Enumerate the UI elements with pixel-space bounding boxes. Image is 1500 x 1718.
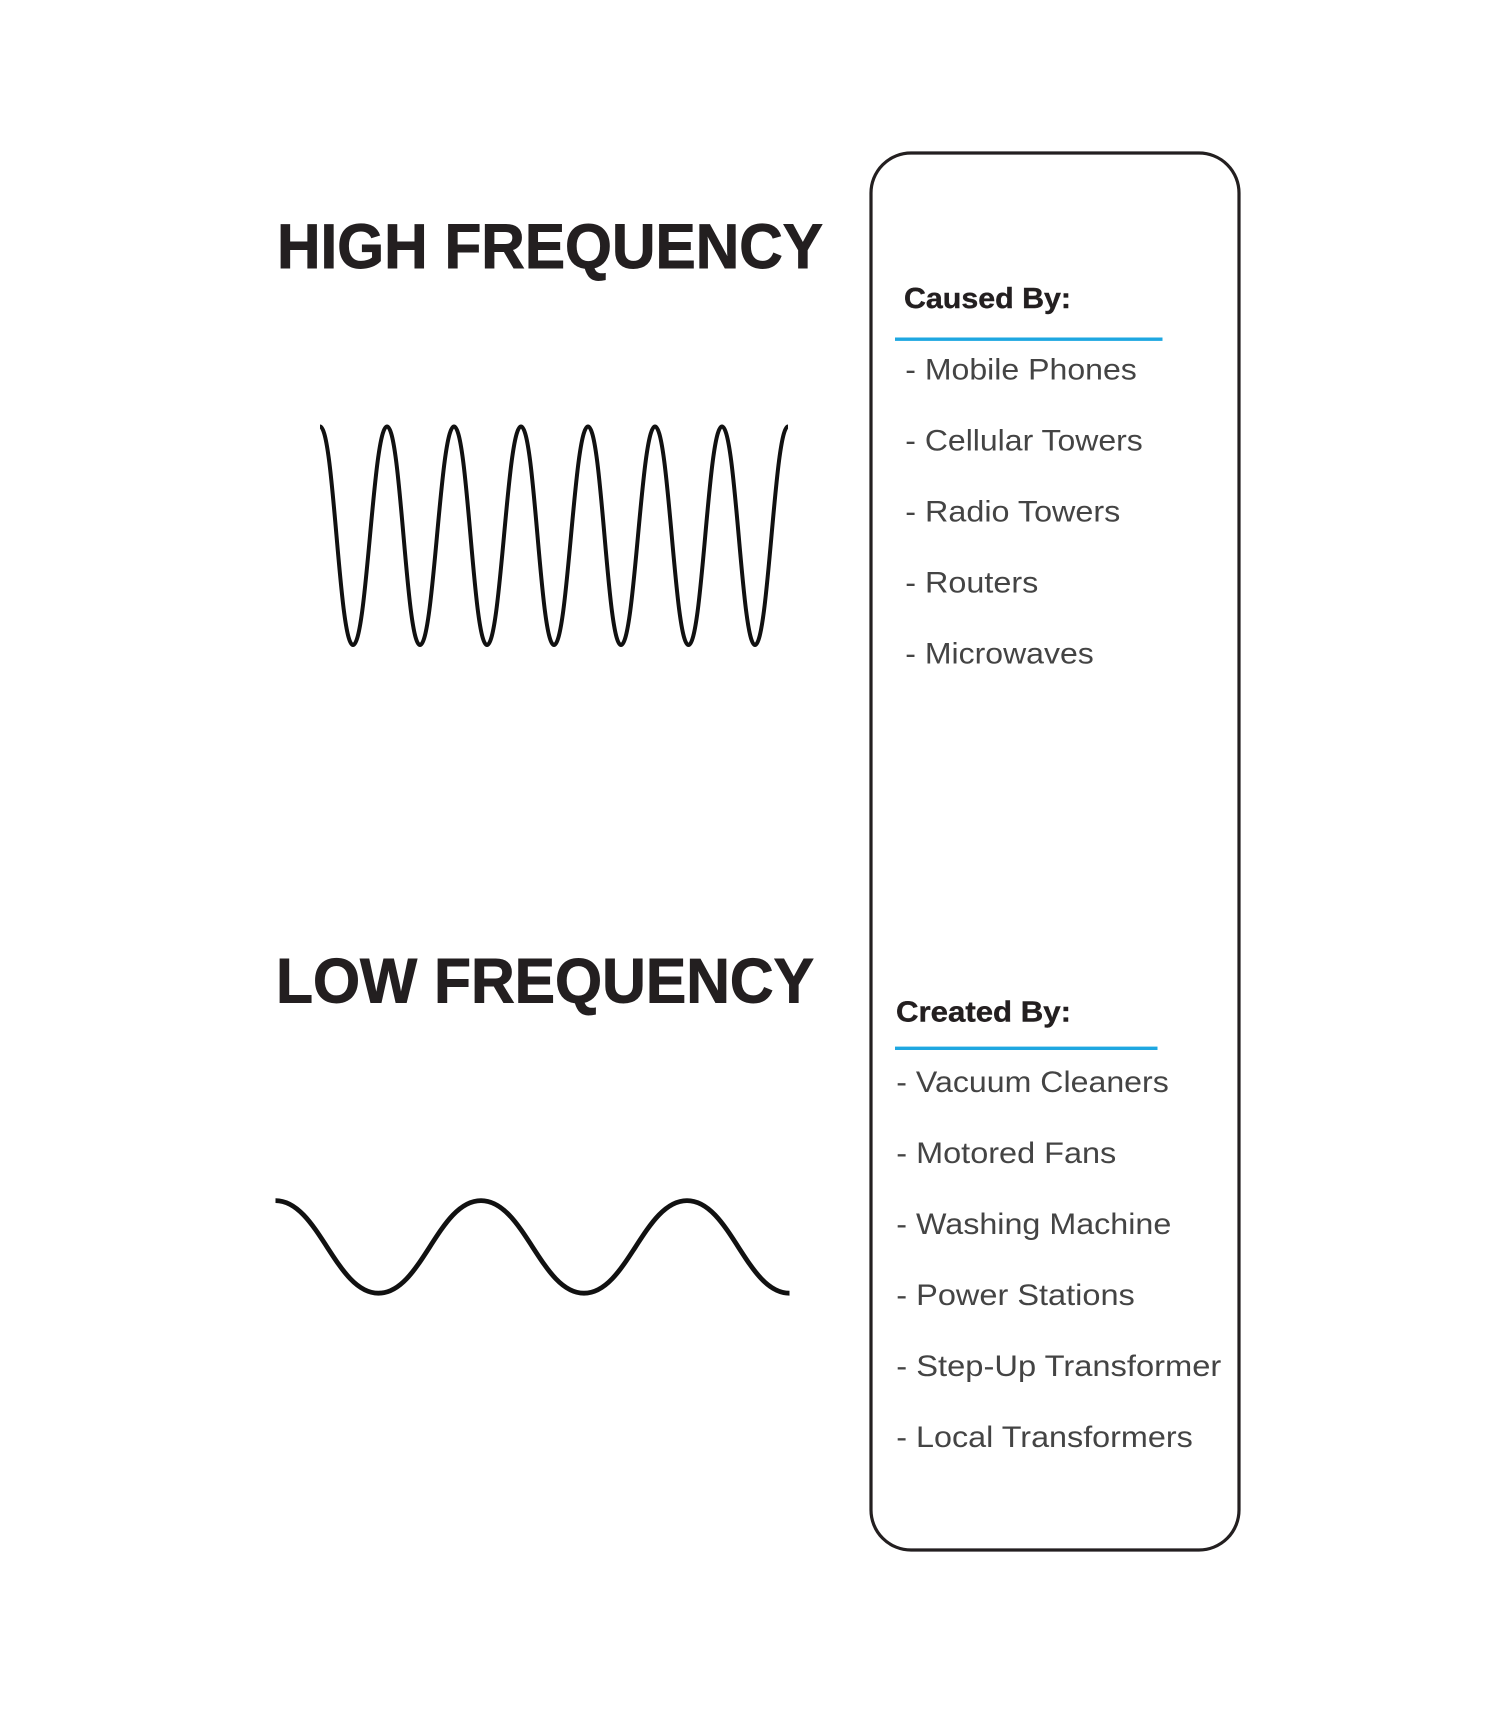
panel: sources list (871, 153, 1239, 1550)
heading: low frequency: LOW FREQUENCY (276, 946, 814, 1016)
section: created by (895, 996, 1221, 1454)
list: caused by items: - Radio Towers (905, 496, 1120, 529)
list: created by items: - Washing Machine (896, 1208, 1171, 1241)
divider: caused by underline (895, 338, 1162, 341)
list: caused by items (905, 354, 1143, 671)
chart: high frequency wave (320, 426, 788, 645)
list: created by items: - Local Transformers (896, 1421, 1193, 1454)
list: caused by items: - Cellular Towers (905, 425, 1143, 458)
list: created by items: - Vacuum Cleaners (896, 1066, 1169, 1099)
heading: high frequency: HIGH FREQUENCY (277, 212, 823, 282)
list: created by items: - Power Stations (896, 1279, 1135, 1312)
section: caused by (895, 283, 1162, 671)
divider: created by underline (895, 1047, 1158, 1050)
list: created by items (896, 1066, 1221, 1454)
list: caused by items: - Routers (905, 567, 1038, 600)
list: created by items: - Motored Fans (896, 1137, 1116, 1170)
list: caused by items: - Mobile Phones (905, 354, 1137, 387)
heading: caused by: Caused By: (904, 283, 1071, 315)
list: caused by items: - Microwaves (905, 638, 1094, 671)
list: created by items: - Step-Up Transformer (896, 1350, 1221, 1383)
chart: low frequency wave (276, 1201, 790, 1293)
heading: created by: Created By: (896, 996, 1071, 1028)
